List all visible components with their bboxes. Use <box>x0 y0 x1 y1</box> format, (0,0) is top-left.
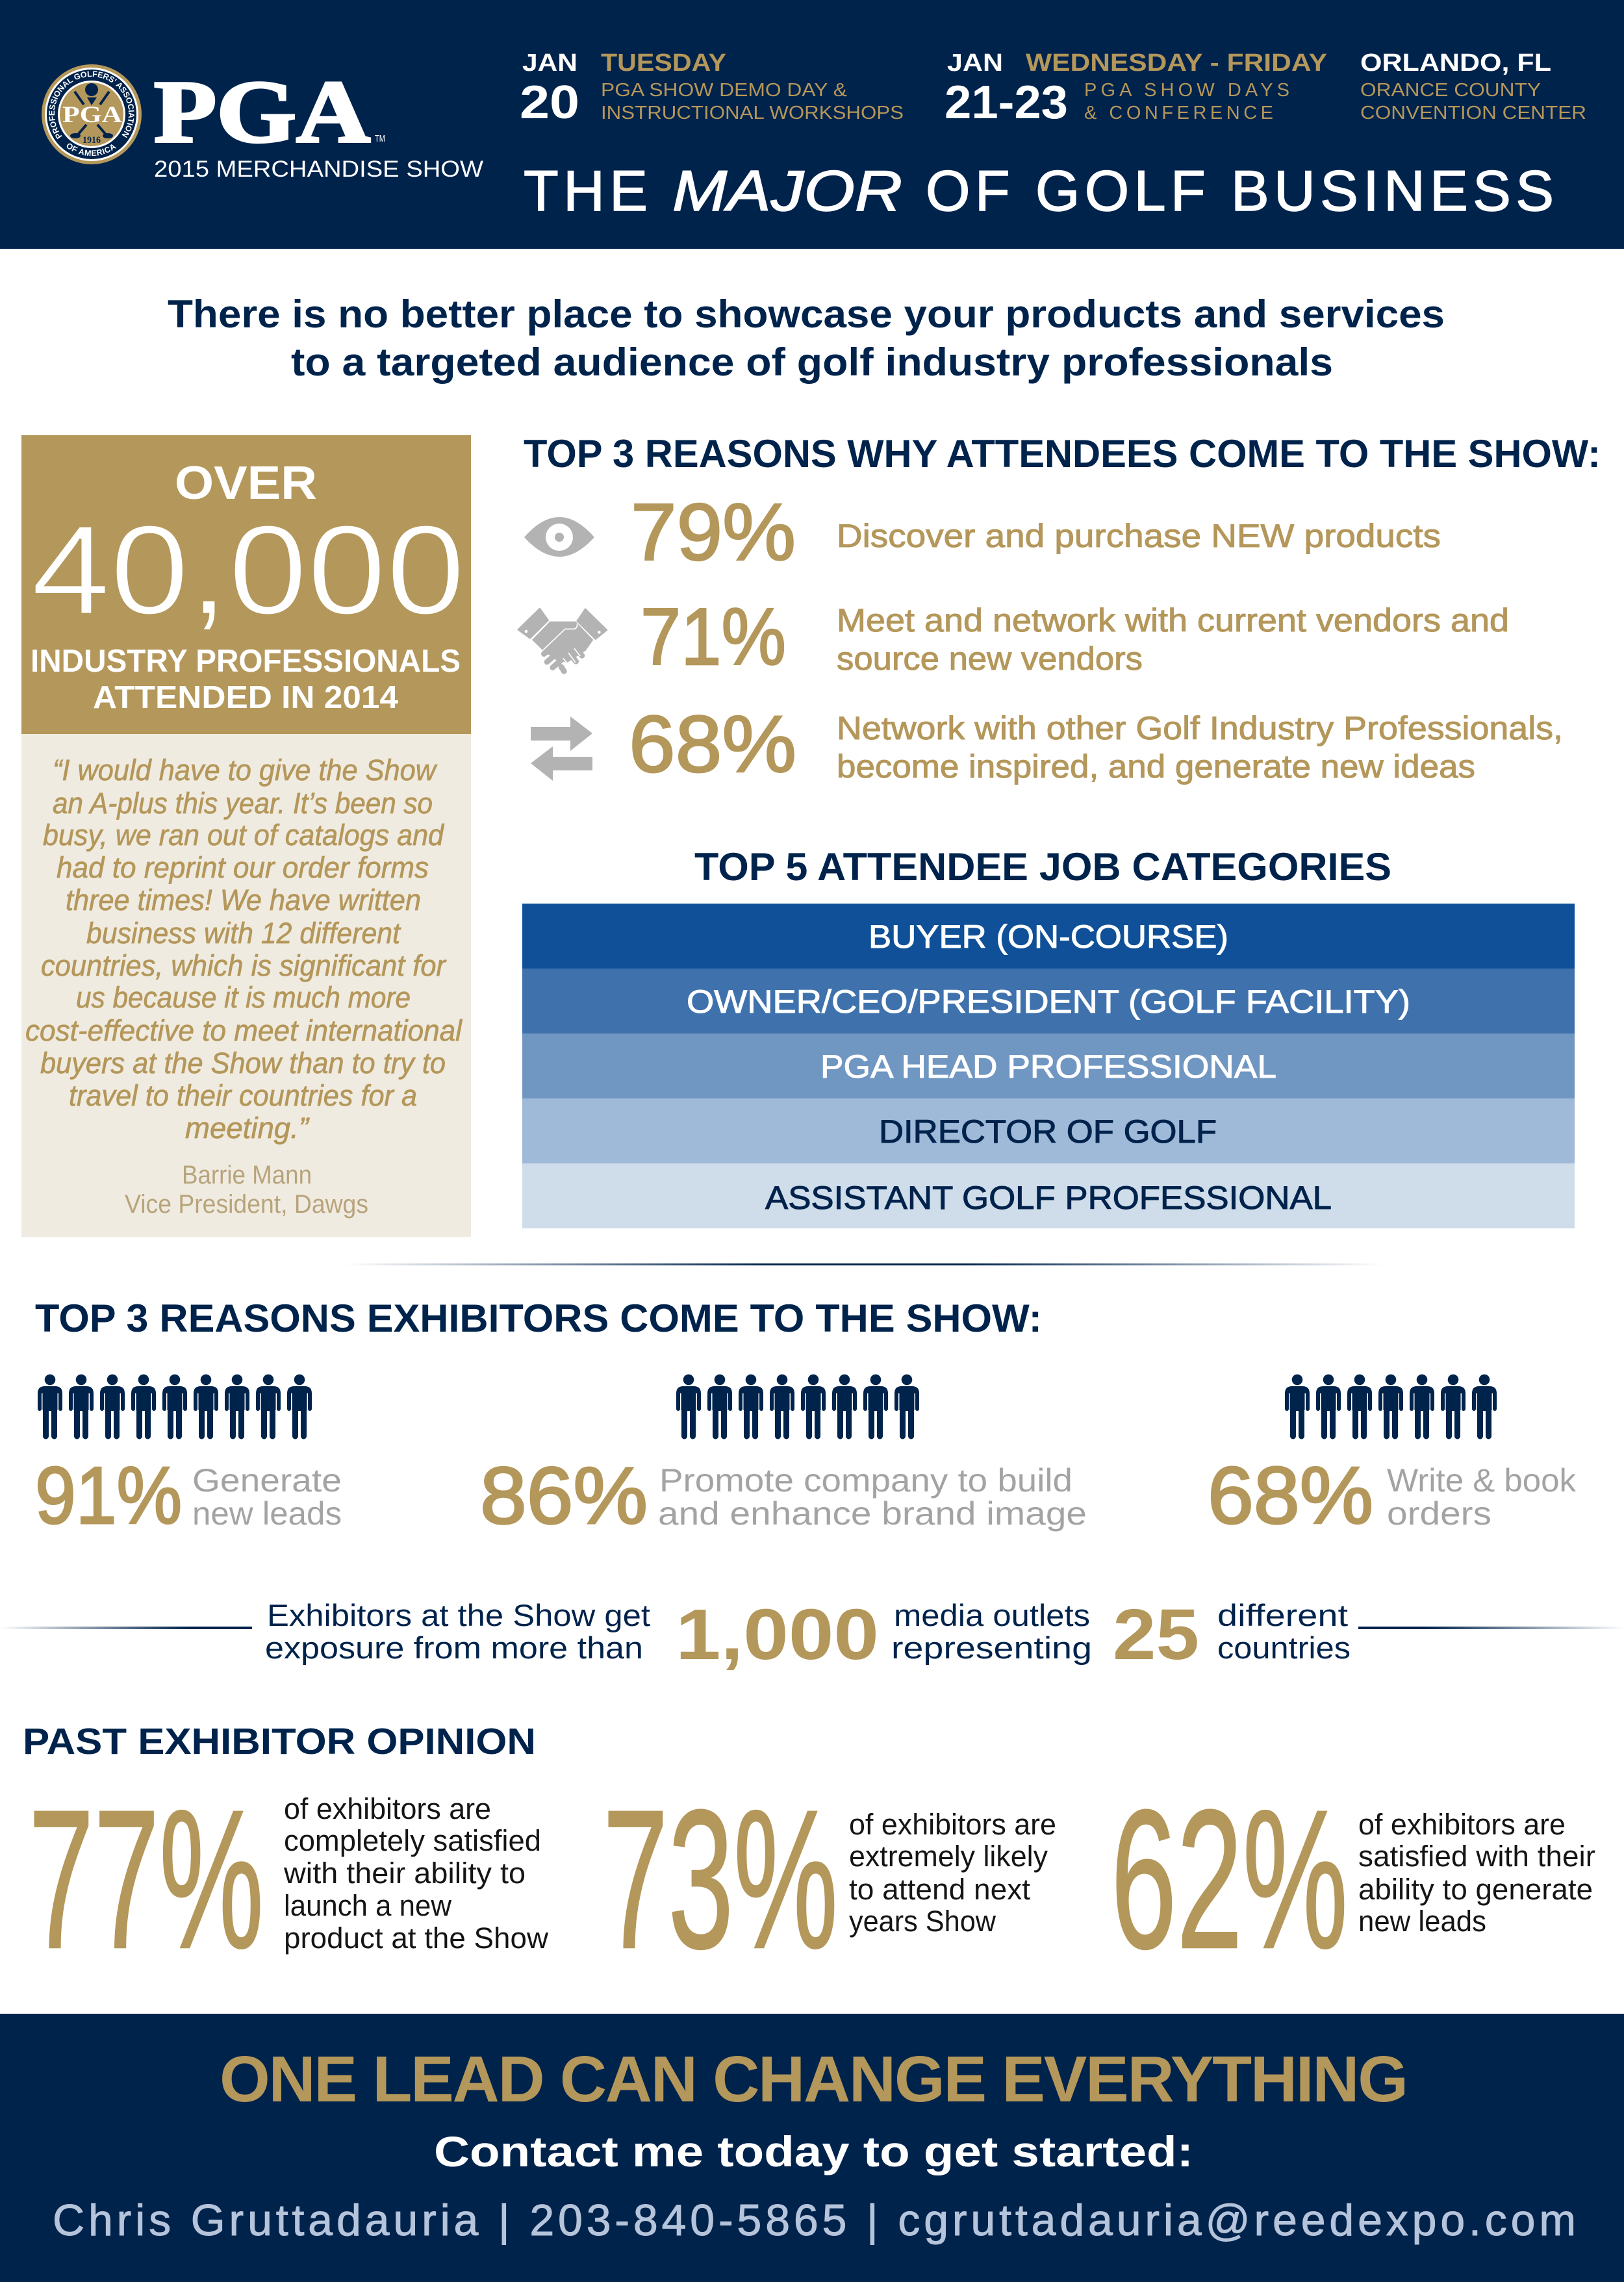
media exposure statement: Exhibitors at the Show get <box>267 1598 650 1632</box>
chart: job category stack: PGA HEAD PROFESSIONAL <box>820 1048 1276 1085</box>
label: write and book orders: orders <box>1387 1495 1491 1532</box>
chart: job category stack: DIRECTOR OF GOLF <box>879 1113 1217 1150</box>
panel: testimonial quote: countries, which is significant for <box>41 949 447 982</box>
date block: Jan 20 <box>520 49 904 129</box>
footer headline: ONE LEAD CAN CHANGE EVERYTHING <box>220 2043 1408 2116</box>
chart: job category stack: ASSISTANT GOLF PROFESSIONAL <box>765 1180 1332 1216</box>
panel: attendance figure: OVER <box>175 457 317 509</box>
opinion text: generate leads <box>1358 1808 1595 1938</box>
opinion text: generate leads: ability to generate <box>1358 1873 1593 1906</box>
logo: PGA emblem: 1916 <box>82 135 101 146</box>
stat: 79 percent: 79% <box>631 488 796 577</box>
opinion text: generate leads: satisfied with their <box>1358 1840 1595 1873</box>
opinion text: attend: to attend next <box>849 1873 1031 1906</box>
panel: testimonial quote: “I would have to give the Show <box>53 754 437 787</box>
icon: exchange arrows <box>531 716 592 781</box>
opinion text: attend: extremely likely <box>849 1840 1048 1873</box>
date block: Jan 20: PGA SHOW DEMO DAY & <box>601 80 847 101</box>
label: generate new leads: Generate <box>192 1462 342 1499</box>
media exposure statement: 1,000 <box>676 1595 879 1675</box>
label: promote company: Promote company to build <box>659 1462 1072 1499</box>
date block: Jan 21-23: 21-23 <box>945 77 1068 129</box>
icon row: 68 percent people <box>1285 1375 1497 1439</box>
footer band <box>0 2014 1624 2282</box>
date block: Jan 21-23: PGA SHOW DAYS <box>1084 80 1289 101</box>
icon: eye <box>524 517 594 557</box>
panel: testimonial quote: buyers at the Show than to try to <box>40 1046 446 1080</box>
heading: top 3 attendee reasons: TOP 3 REASONS WHY ATTENDEES COME TO THE SHOW: <box>524 432 1601 475</box>
media exposure statement: countries <box>1217 1630 1351 1665</box>
location block: ORANCE COUNTY <box>1360 80 1541 101</box>
opinion text: launch: of exhibitors are <box>284 1792 491 1825</box>
reason: vendors: source new vendors <box>837 640 1143 677</box>
opinion text: launch: product at the Show <box>284 1921 548 1955</box>
chart: job category stack: BUYER (ON-COURSE) <box>869 919 1228 955</box>
heading: top 3 exhibitor reasons: TOP 3 REASONS EXHIBITORS COME TO THE SHOW: <box>35 1297 1042 1340</box>
location block: CONVENTION CENTER <box>1360 103 1586 123</box>
media exposure statement: different <box>1217 1598 1348 1632</box>
logo: PGA wordmark: TM <box>375 133 385 144</box>
reason: vendors <box>837 602 1509 677</box>
tagline <box>524 158 1554 223</box>
location block: ORLANDO, FL <box>1360 49 1551 77</box>
tagline: OF GOLF BUSINESS <box>926 158 1554 223</box>
opinion text: attend: years Show <box>849 1905 996 1938</box>
label: promote company: and enhance brand image <box>658 1495 1087 1532</box>
panel: testimonial quote: three times! We have written <box>66 883 421 917</box>
quote attribution <box>125 1161 368 1219</box>
label: generate new leads <box>192 1462 342 1532</box>
date block: Jan 21-23: & CONFERENCE <box>1084 103 1273 123</box>
heading: past exhibitor opinion: PAST EXHIBITOR OPINION <box>23 1721 536 1762</box>
logo: PGA wordmark: PGA <box>154 62 370 161</box>
panel: testimonial quote <box>21 734 471 1237</box>
stat: 73 percent: 73% <box>603 1769 838 1990</box>
reason: networking: Network with other Golf Industry Professionals, <box>837 710 1563 746</box>
chart: job category stack <box>522 904 1575 1228</box>
stat: 68 percent exhibitors: 68% <box>1208 1451 1373 1541</box>
panel: testimonial quote: meeting.” <box>185 1111 310 1145</box>
opinion text: attend: of exhibitors are <box>849 1808 1056 1841</box>
opinion text: generate leads: of exhibitors are <box>1358 1808 1566 1841</box>
icon: handshake <box>518 609 607 671</box>
logo: PGA emblem: OF AMERICA <box>66 143 116 156</box>
panel: testimonial quote: cost-effective to meet international <box>25 1014 463 1047</box>
intro statement: There is no better place to showcase your products and services <box>168 292 1445 336</box>
label: generate new leads: new leads <box>192 1495 342 1532</box>
reason: vendors: Meet and network with current vendors and <box>837 602 1509 639</box>
media exposure statement: exposure from more than <box>265 1630 643 1665</box>
date block: Jan 20: TUESDAY <box>601 49 726 77</box>
date block: Jan 21-23 <box>945 49 1327 129</box>
chart: job category stack: OWNER/CEO/PRESIDENT (GOLF FACILITY) <box>687 983 1410 1020</box>
label: write and book orders <box>1387 1462 1577 1532</box>
logo: PGA emblem: PROFESSIONAL GOLFERS' ASSOCIATION <box>49 71 134 139</box>
media exposure statement: 25 <box>1113 1595 1199 1675</box>
date block: Jan 20: JAN <box>522 49 577 77</box>
media exposure statement: media outlets <box>894 1598 1090 1632</box>
heading: job categories: TOP 5 ATTENDEE JOB CATEGORIES <box>694 845 1391 889</box>
stat: 62 percent: 62% <box>1111 1769 1348 1990</box>
stat: 91 percent: 91% <box>35 1451 182 1541</box>
stat: 77 percent: 77% <box>29 1769 264 1990</box>
panel: testimonial quote: had to reprint our order forms <box>57 851 429 884</box>
location block <box>1360 49 1586 123</box>
quote attribution: Barrie Mann <box>182 1161 312 1189</box>
stat: 86 percent: 86% <box>480 1451 648 1541</box>
reason: new products: Discover and purchase NEW products <box>837 518 1441 554</box>
quote attribution: Vice President, Dawgs <box>125 1190 368 1219</box>
tagline: MAJOR <box>672 158 902 223</box>
intro statement <box>168 292 1445 384</box>
header band <box>0 0 1624 249</box>
date block: Jan 20: 20 <box>520 77 579 129</box>
panel: testimonial quote: busy, we ran out of catalogs and <box>43 818 445 852</box>
opinion text: launch: completely satisfied <box>284 1824 541 1857</box>
show name: 2015 MERCHANDISE SHOW <box>154 157 483 182</box>
icon row: 86 percent people <box>676 1375 919 1439</box>
opinion text: launch <box>283 1792 548 1955</box>
panel: testimonial quote: travel to their countries for a <box>69 1079 417 1112</box>
panel: testimonial quote: us because it is much more <box>76 981 411 1014</box>
logo: PGA emblem <box>42 64 142 164</box>
reason: networking: become inspired, and generate new ideas <box>837 748 1475 785</box>
date block: Jan 21-23: JAN <box>947 49 1003 77</box>
logo: PGA emblem: PGA <box>62 101 122 127</box>
panel: testimonial quote: an A-plus this year. It’s been so <box>53 787 433 820</box>
date block: Jan 20: INSTRUCTIONAL WORKSHOPS <box>601 103 904 123</box>
footer contact details: Chris Gruttadauria | 203-840-5865 | cgruttadauria@reedexpo.com <box>53 2196 1576 2245</box>
panel: testimonial quote: business with 12 different <box>86 917 401 950</box>
opinion text: launch: with their ability to <box>283 1857 526 1890</box>
footer call to action: Contact me today to get started: <box>434 2127 1193 2175</box>
panel: attendance figure: INDUSTRY PROFESSIONALS <box>31 644 461 679</box>
intro statement: to a targeted audience of golf industry professionals <box>291 340 1333 384</box>
opinion text: launch: launch a new <box>284 1889 451 1922</box>
reason: networking <box>837 710 1563 785</box>
panel: attendance figure: 40,000 <box>31 499 465 641</box>
panel: attendance figure <box>21 435 471 734</box>
media exposure statement: representing <box>891 1630 1092 1665</box>
media exposure statement <box>265 1595 1351 1675</box>
stat: 71 percent: 71% <box>641 592 786 682</box>
panel: attendance figure: ATTENDED IN 2014 <box>93 680 398 715</box>
opinion text: attend <box>849 1808 1056 1938</box>
stat: 68 percent: 68% <box>629 700 796 789</box>
icon row: 91 percent people <box>38 1375 312 1439</box>
date block: Jan 21-23: WEDNESDAY - FRIDAY <box>1026 49 1327 77</box>
tagline: THE <box>524 158 648 223</box>
label: promote company <box>658 1462 1087 1532</box>
opinion text: generate leads: new leads <box>1358 1905 1486 1938</box>
label: write and book orders: Write & book <box>1387 1462 1577 1499</box>
